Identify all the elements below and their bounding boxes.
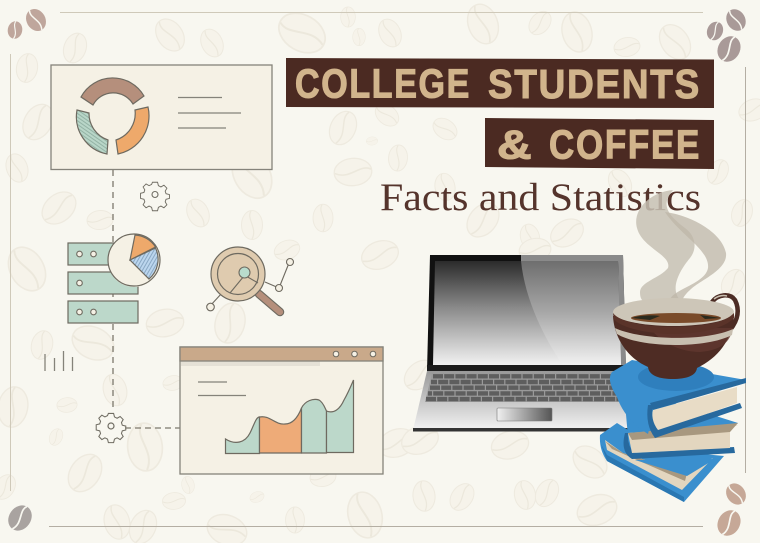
area chart	[226, 380, 354, 454]
icon: magnifier with data nodes	[207, 247, 294, 312]
keyboard	[425, 373, 625, 402]
laptop lid	[427, 255, 626, 371]
subtitle: Facts and Statistics	[380, 176, 701, 219]
cup stripe	[615, 328, 733, 345]
text lines	[198, 382, 246, 396]
donut segment: brown	[81, 78, 144, 105]
server rows	[68, 243, 138, 323]
bottom book	[600, 423, 724, 502]
laptop screen	[433, 261, 621, 365]
laptop	[413, 255, 640, 432]
cup rim	[613, 298, 734, 326]
corner beans: bottom right	[713, 480, 750, 540]
coffee surface	[631, 313, 721, 323]
donut segment: orange	[116, 107, 149, 154]
cup body	[613, 316, 734, 379]
trackpad	[497, 408, 552, 421]
top book	[610, 360, 746, 434]
icon: large gear	[96, 413, 126, 443]
coffee cup on books	[600, 295, 746, 502]
steam	[636, 190, 726, 305]
title: College Students: STUDENTS	[488, 61, 701, 107]
pie chart	[108, 235, 160, 287]
connector: dashed vertical line	[112, 170, 114, 412]
icon: small bars	[45, 351, 72, 371]
title: College Students	[286, 58, 714, 108]
connector: dashed horizontal line with node	[125, 425, 208, 431]
title: & Coffee	[485, 118, 714, 169]
title: & Coffee: COFFEE	[549, 122, 701, 168]
panel: donut chart card	[51, 65, 272, 170]
middle book	[625, 392, 738, 437]
cup handle	[712, 295, 738, 330]
corner beans: top left	[6, 5, 50, 40]
title: & Coffee: &	[497, 122, 534, 168]
icon: server stack with pie chart	[68, 234, 160, 323]
books	[600, 360, 746, 502]
legend lines	[178, 98, 241, 128]
donut segment: green hatched	[76, 110, 108, 154]
laptop base	[413, 371, 637, 430]
corner bean: bottom left	[3, 501, 37, 535]
icon: small gear	[141, 182, 169, 211]
panel: browser window area chart	[180, 347, 383, 474]
corner beans: top right	[704, 6, 750, 66]
cup front lighter panel	[650, 328, 733, 352]
title: College Students: COLLEGE	[295, 60, 471, 106]
window title bar	[180, 347, 383, 361]
